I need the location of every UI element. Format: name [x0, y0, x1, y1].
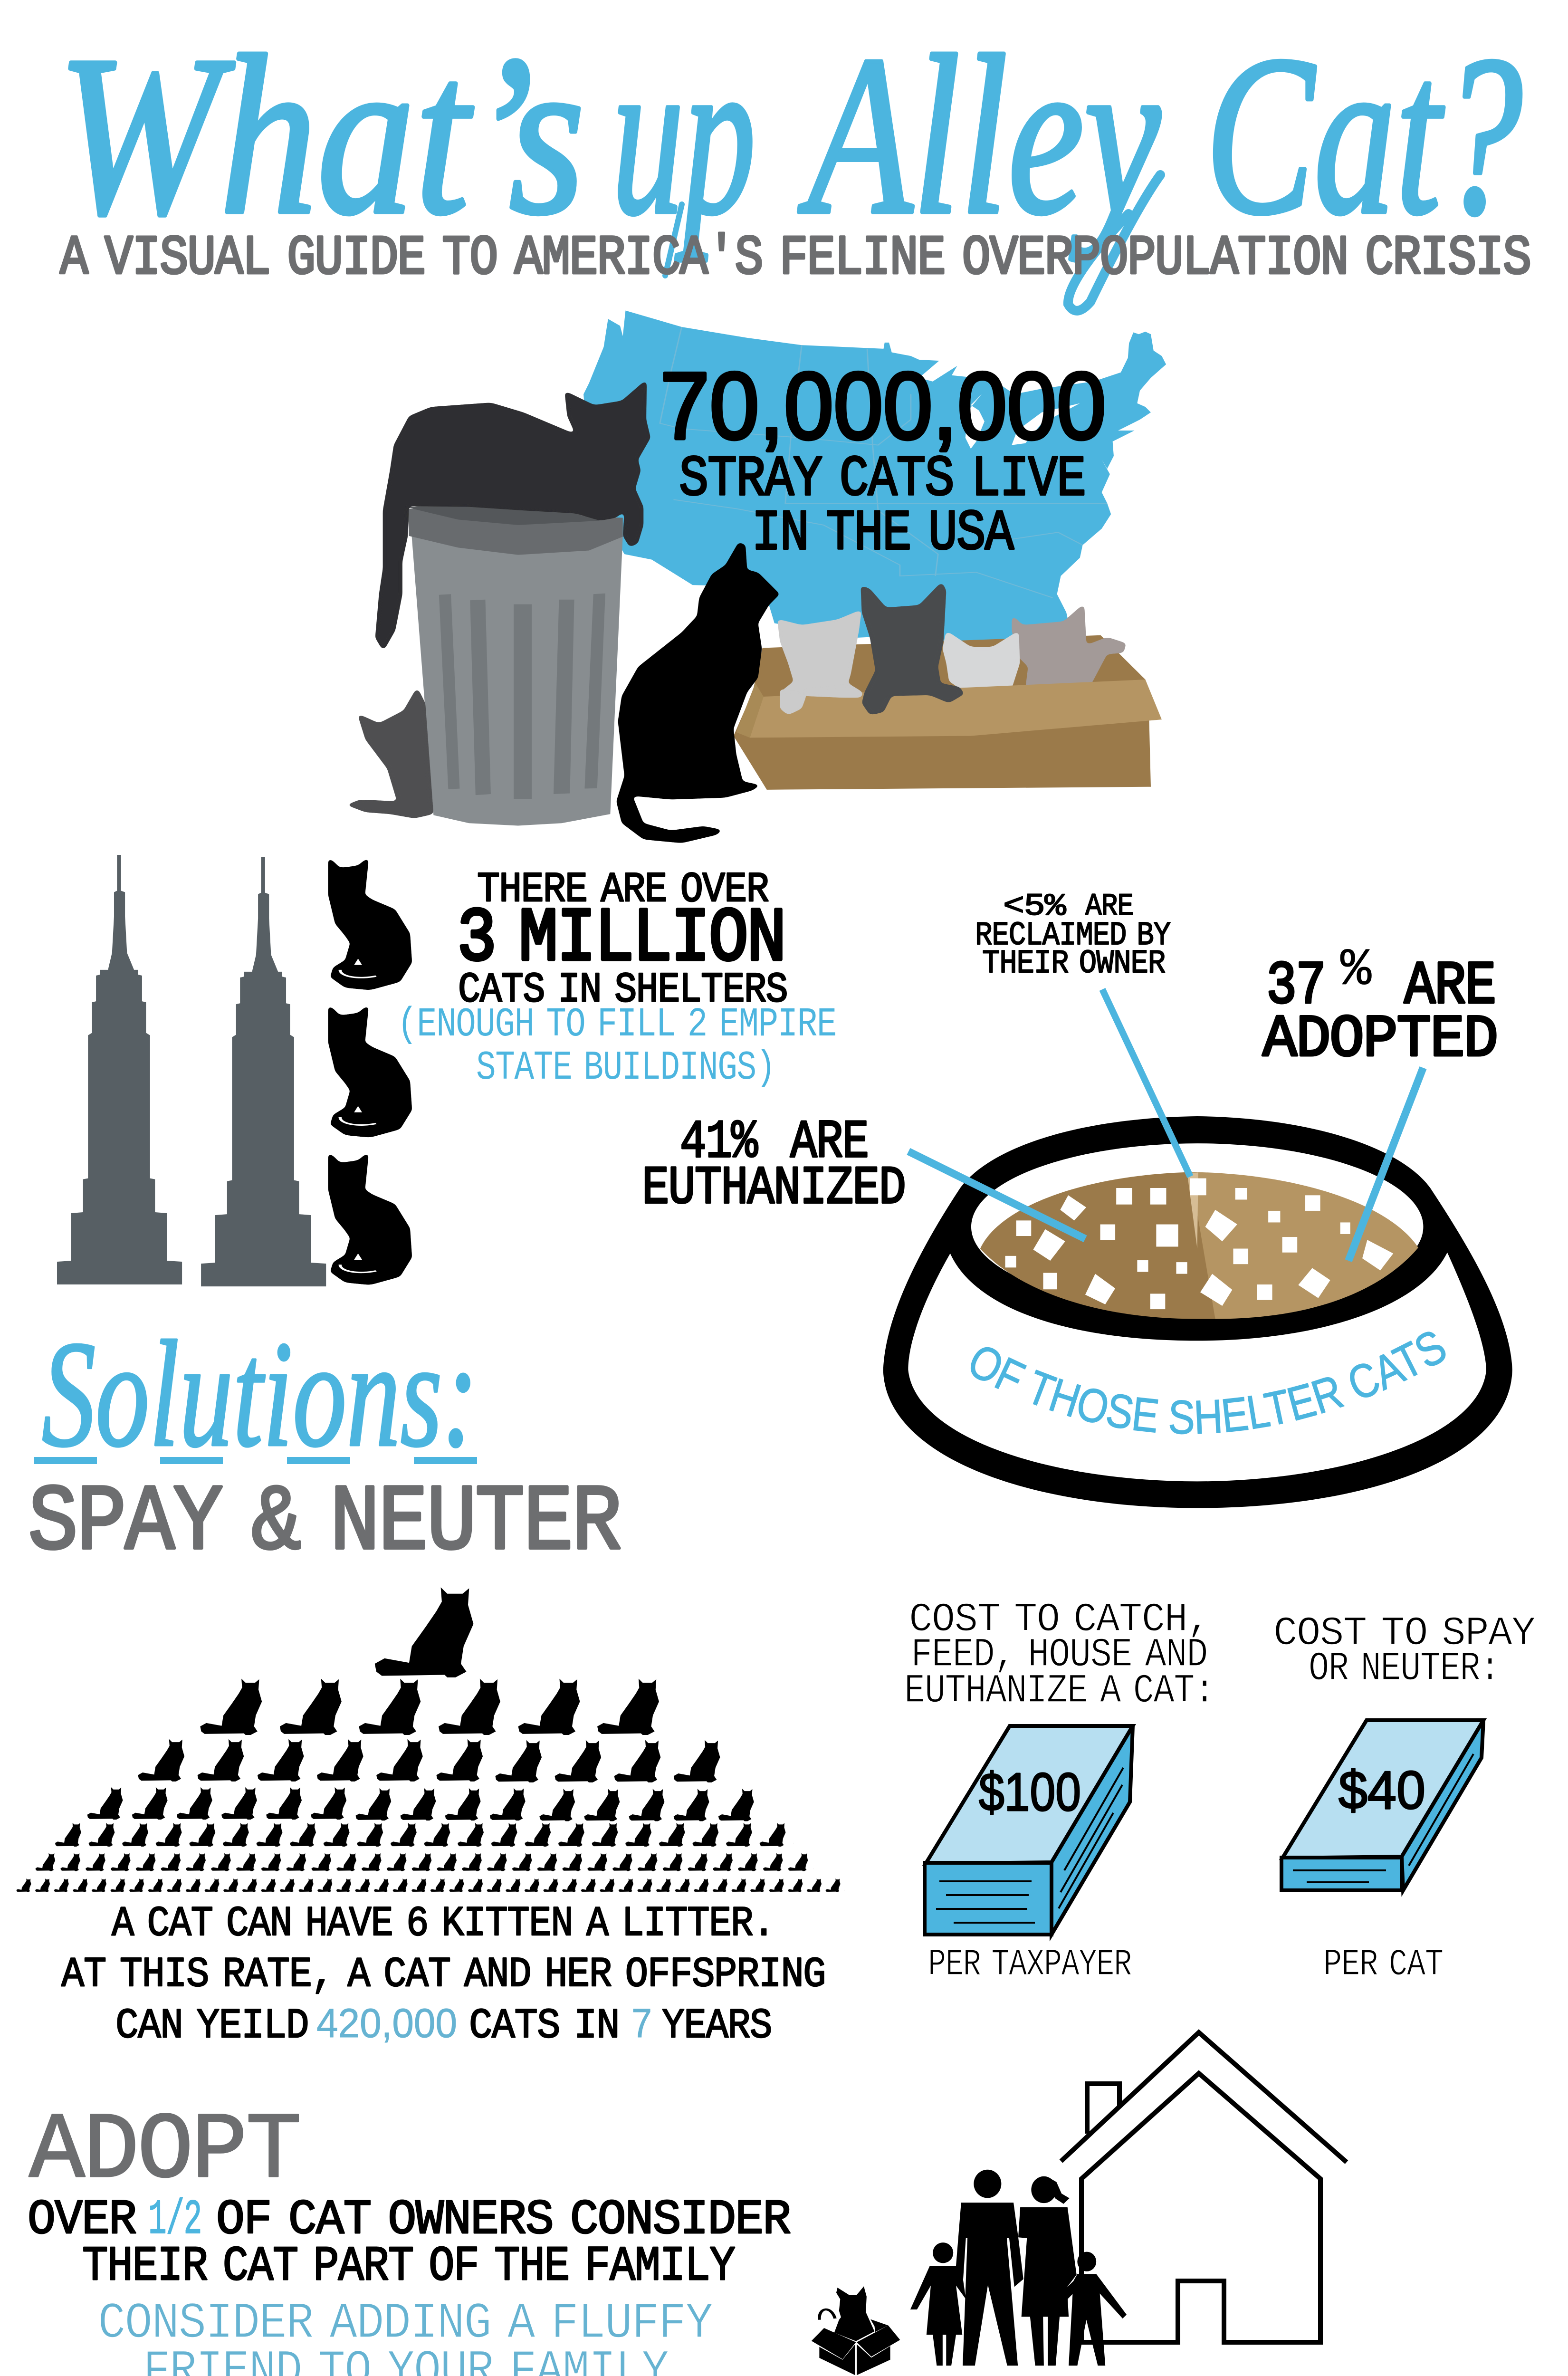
adopted label: ARE — [1404, 952, 1495, 1021]
boy — [1067, 2252, 1127, 2366]
per cat caption: PER CAT — [1323, 1943, 1443, 1986]
euthanized label: 41% — [680, 1112, 758, 1173]
amount: 40 dollars: $40 — [1339, 1760, 1425, 1820]
adopted label: 37 — [1266, 952, 1325, 1021]
reclaimed label: ARE — [1085, 889, 1133, 924]
kitten growth text: AT THIS RATE, A CAT AND HER OFFSPRING — [61, 1951, 825, 1999]
girl — [910, 2242, 966, 2366]
arrow: reclaimed — [1102, 989, 1190, 1177]
house — [1061, 2032, 1347, 2342]
arrow: adopted — [1348, 1068, 1423, 1261]
euthanized label: ARE — [790, 1112, 868, 1173]
kitten growth text: CATS IN — [469, 2002, 619, 2050]
money stack: 100 dollars — [925, 1726, 1133, 1935]
cat on the trash can — [375, 379, 650, 651]
empire state buildings — [57, 855, 326, 1286]
trash can — [408, 506, 623, 826]
adopt call to action: CONSIDER ADDING A FLUFFY — [98, 2295, 713, 2353]
cost captions: OR NEUTER: — [1309, 1646, 1500, 1692]
reclaimed label: <5% — [1003, 889, 1066, 924]
cat population pyramid — [16, 1587, 844, 1893]
map of the USA — [583, 311, 1166, 649]
stray cat statistic: 70,000,000 — [660, 353, 1106, 459]
small cat behind can — [346, 687, 433, 818]
cost captions: COST TO SPAY — [1273, 1610, 1535, 1657]
stray cat statistic: STRAY CATS LIVE — [679, 447, 1085, 512]
title: Alley — [797, 9, 1162, 262]
cardboard box — [734, 581, 1162, 790]
cat in a box — [812, 2286, 900, 2375]
hero illustration: map, trash can, cats and box — [346, 311, 1166, 843]
stray cat statistic — [660, 353, 1106, 566]
cost captions: EUTHANIZE A CAT: — [904, 1668, 1214, 1714]
kittens — [777, 603, 1126, 715]
amount: 100 dollars: $100 — [979, 1762, 1081, 1822]
black cat — [616, 541, 780, 843]
adopted label: ADOPTED — [1262, 1006, 1497, 1073]
cost captions — [904, 1597, 1535, 1714]
reclaimed label: RECLAIMED BY — [975, 917, 1170, 955]
shelter statistic: 3 MILLION — [457, 897, 785, 983]
cost captions: COST TO CATCH, — [909, 1597, 1210, 1643]
kitten growth text: CAN YEILD — [115, 2002, 308, 2050]
shelter statistic: CATS IN SHELTERS — [458, 966, 787, 1014]
food bowl — [883, 1116, 1512, 1508]
title — [57, 9, 1522, 311]
adopt statistic: OF CAT OWNERS CONSIDER — [216, 2192, 790, 2248]
family — [910, 2170, 1127, 2366]
kitten growth text: 7 — [631, 2001, 652, 2046]
shelter statistic: THERE ARE OVER — [477, 866, 768, 914]
per taxpayer caption: PER TAXPAYER — [928, 1943, 1131, 1986]
mother — [1018, 2176, 1077, 2366]
adopt statistic: 1/2 — [148, 2192, 201, 2248]
shelter statistic: (ENOUGH TO FILL 2 EMPIRE — [397, 1001, 836, 1048]
stray cat statistic: IN THE USA — [752, 501, 1014, 566]
solutions heading — [34, 1310, 478, 1478]
spay and neuter heading: SPAY & NEUTER — [28, 1471, 620, 1577]
adopted label — [1262, 941, 1497, 1073]
adopt statistic — [28, 2192, 790, 2294]
bowl label: OF THOSE SHELTER CATS — [959, 1319, 1455, 1444]
kitten growth text: A CAT CAN HAVE 6 KITTEN A LITTER. — [112, 1900, 774, 1948]
arrow: euthanized — [908, 1151, 1085, 1239]
kitten growth text — [61, 1900, 825, 2050]
kitten growth text: 420,000 — [316, 2001, 457, 2046]
euthanized label: EUTHANIZED — [642, 1158, 905, 1219]
adopt call to action — [98, 2295, 713, 2376]
adopt statistic: THEIR CAT PART OF THE FAMILY — [82, 2239, 735, 2294]
adopted label: % — [1340, 941, 1372, 1000]
euthanized label — [642, 1112, 905, 1219]
cost captions: FEED, HOUSE AND — [911, 1632, 1207, 1678]
cat food — [980, 1172, 1418, 1319]
three cats — [328, 856, 412, 1285]
adopt statistic: OVER — [28, 2192, 136, 2248]
reclaimed label — [975, 889, 1170, 983]
kitten growth text: YEARS — [662, 2002, 772, 2050]
father — [956, 2170, 1023, 2366]
title: up — [612, 9, 755, 262]
reclaimed label: THEIR OWNER — [982, 945, 1165, 983]
title: What’s — [57, 9, 585, 261]
solutions heading: Solutions: — [42, 1310, 478, 1478]
shelter statistic: STATE BUILDINGS) — [476, 1044, 775, 1091]
money stack: 40 dollars — [1281, 1720, 1483, 1890]
shelter statistic — [397, 866, 836, 1091]
adopt heading: ADOPT — [29, 2098, 300, 2205]
